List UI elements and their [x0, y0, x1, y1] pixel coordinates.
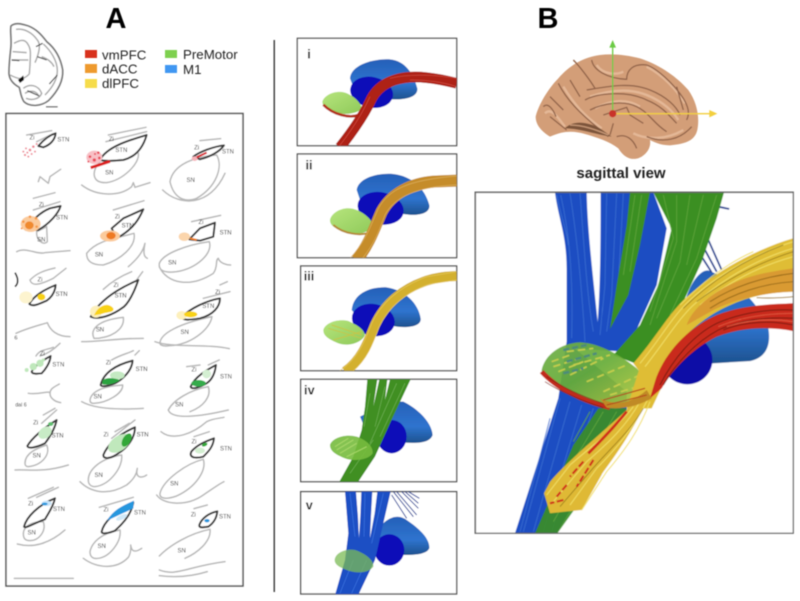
row 6: M1 sections: STN	[134, 511, 146, 517]
row 5: PreMotor sections	[15, 408, 232, 503]
STN shell	[357, 174, 429, 215]
dark blue streamlines	[702, 207, 729, 272]
row 4: PreMotor sections: Zi	[40, 351, 45, 357]
heading: B: B	[538, 3, 558, 35]
row 6: M1 sections: STN	[53, 507, 65, 513]
row 1: vmPFC sections: STN	[115, 148, 127, 154]
panel v: M1 tract: v	[306, 498, 313, 512]
row 3: dlPFC sections: SN	[96, 327, 104, 333]
row 2: dACC sections: STN	[56, 216, 68, 222]
green target	[323, 320, 365, 345]
legend item: M1	[165, 62, 201, 77]
row 1: vmPFC sections: SN	[186, 178, 195, 184]
dark blue streamlines	[392, 492, 419, 518]
row 3: dlPFC sections: 6	[14, 335, 18, 341]
yellow tract	[345, 276, 457, 372]
panel i: vmPFC tract: i	[307, 47, 311, 61]
row 3: dlPFC sections	[14, 268, 230, 349]
inner nucleus	[350, 76, 394, 109]
yellow tract	[544, 238, 793, 513]
row 2: dACC sections: Zi	[198, 220, 203, 226]
row 2: dACC sections: STN	[220, 230, 232, 236]
caption: sagittal view: sagittal view	[576, 165, 666, 182]
row 5: PreMotor sections: STN	[52, 434, 64, 440]
STN shell	[350, 59, 417, 99]
orange tract	[357, 181, 457, 260]
green target	[335, 550, 373, 572]
inner nucleus	[374, 534, 404, 566]
legend	[85, 47, 238, 91]
row 2: dACC sections: STN	[122, 223, 134, 229]
inner nucleus	[377, 420, 407, 453]
brain surface	[536, 54, 698, 159]
row 5: PreMotor sections: SN	[32, 454, 41, 460]
row 2: dACC sections: SN	[168, 261, 176, 267]
STN shell	[380, 517, 429, 555]
row 4: PreMotor sections: SN	[93, 395, 102, 401]
row 4: PreMotor sections: STN	[52, 362, 64, 368]
row 6: M1 sections: SN	[177, 548, 186, 554]
row 2: dACC sections	[17, 193, 232, 282]
inner nucleus	[356, 191, 404, 226]
row 1: vmPFC sections: STN	[222, 150, 234, 156]
legend item: dACC: dACC	[102, 62, 138, 76]
green target	[330, 208, 373, 234]
row 6: M1 sections: SN	[97, 544, 106, 550]
green target	[542, 342, 647, 407]
row 4: PreMotor sections: SN	[175, 402, 183, 408]
panel ii: dACC tract	[297, 154, 457, 260]
row 2: dACC sections: Zi	[115, 215, 120, 221]
brain sagittal view	[536, 40, 717, 159]
row 5: PreMotor sections: Zi	[191, 440, 196, 446]
sulci	[543, 60, 692, 148]
green tracts	[535, 192, 724, 533]
row 5: PreMotor sections: SN	[94, 473, 103, 479]
row 6: M1 sections: Zi	[191, 512, 196, 518]
row 1: vmPFC sections: STN	[57, 138, 69, 144]
heading: A: A	[106, 3, 127, 35]
row 4: PreMotor sections: Zi	[106, 361, 111, 367]
STN shell	[360, 402, 433, 443]
row 2: dACC sections: SN	[95, 253, 103, 259]
row 5: PreMotor sections: Zi	[103, 432, 108, 438]
row 1: vmPFC sections: SN	[105, 171, 113, 177]
panel iv: PreMotor tract: iv	[304, 383, 315, 397]
axis arrow: yellow horizontal	[613, 110, 717, 117]
row 6: M1 sections: Zi	[103, 507, 108, 513]
row 1: vmPFC sections: Zi	[29, 135, 34, 141]
panel ii: dACC tract: ii	[305, 158, 313, 172]
legend item: M1: M1	[183, 62, 201, 77]
row 3: dlPFC sections: Zi	[37, 277, 42, 283]
row 1: vmPFC sections: Zi	[194, 146, 199, 152]
row 3: dlPFC sections: SN	[180, 330, 189, 336]
legend item: dlPFC	[85, 76, 139, 91]
STN shell	[352, 287, 421, 327]
row 3: dlPFC sections: Zi	[113, 283, 118, 289]
row 4: PreMotor sections: STN	[136, 367, 148, 373]
panel B: combined tract view	[475, 192, 793, 533]
red tract	[323, 105, 358, 116]
panel A: STN projection sections	[6, 114, 243, 586]
legend item: dACC	[85, 62, 138, 76]
panel v: M1 tract	[301, 492, 457, 595]
panel i: vmPFC tract	[297, 38, 457, 147]
inner nucleus	[351, 303, 396, 337]
row 4: PreMotor sections: dal 6	[15, 402, 27, 408]
row 3: dlPFC sections: STN	[202, 304, 214, 310]
green target	[330, 436, 373, 460]
row 3: dlPFC sections: STN	[56, 292, 68, 298]
row 6: M1 sections: Zi	[28, 501, 33, 507]
STN shell	[683, 270, 769, 364]
row 6: M1 sections: SN	[27, 530, 36, 536]
row 5: PreMotor sections: STN	[137, 432, 149, 438]
icon: coronal brain slice with scale bar	[9, 24, 63, 107]
green tract	[339, 379, 411, 482]
blue tract	[335, 492, 391, 595]
gyri highlights	[545, 65, 685, 138]
axis arrow: green vertical	[609, 40, 616, 113]
panel iii: dlPFC tract: iii	[304, 270, 314, 284]
legend item: PreMotor: PreMotor	[183, 47, 238, 62]
row 2: dACC sections: Zi	[39, 202, 44, 208]
legend item: vmPFC: vmPFC	[102, 48, 147, 62]
green target	[322, 92, 362, 114]
row 6: M1 sections	[14, 487, 231, 578]
row 2: dACC sections: SN	[37, 237, 45, 243]
row 6: M1 sections: STN	[219, 514, 231, 520]
row 5: PreMotor sections: Zi	[33, 420, 38, 426]
orange tract	[687, 268, 793, 325]
row 4: PreMotor sections	[15, 343, 232, 412]
divider between A and the tract panels	[274, 40, 275, 592]
row 1: vmPFC sections	[22, 127, 234, 201]
panel iii: dlPFC tract	[301, 266, 457, 372]
row 5: PreMotor sections: STN	[220, 446, 232, 452]
row 5: PreMotor sections: SN	[170, 482, 178, 488]
red tract	[542, 303, 793, 503]
legend item: dlPFC: dlPFC	[102, 76, 139, 91]
inner nucleus	[668, 342, 713, 386]
row 1: vmPFC sections: Zi	[109, 137, 114, 143]
panel iv: PreMotor tract	[301, 379, 457, 482]
row 3: dlPFC sections: STN	[115, 294, 127, 300]
origin marker	[609, 110, 616, 117]
row 4: PreMotor sections: STN	[220, 375, 232, 381]
blue tracts	[515, 192, 667, 533]
row 3: dlPFC sections: Zi	[215, 290, 220, 296]
row 4: PreMotor sections: Zi	[191, 367, 196, 373]
